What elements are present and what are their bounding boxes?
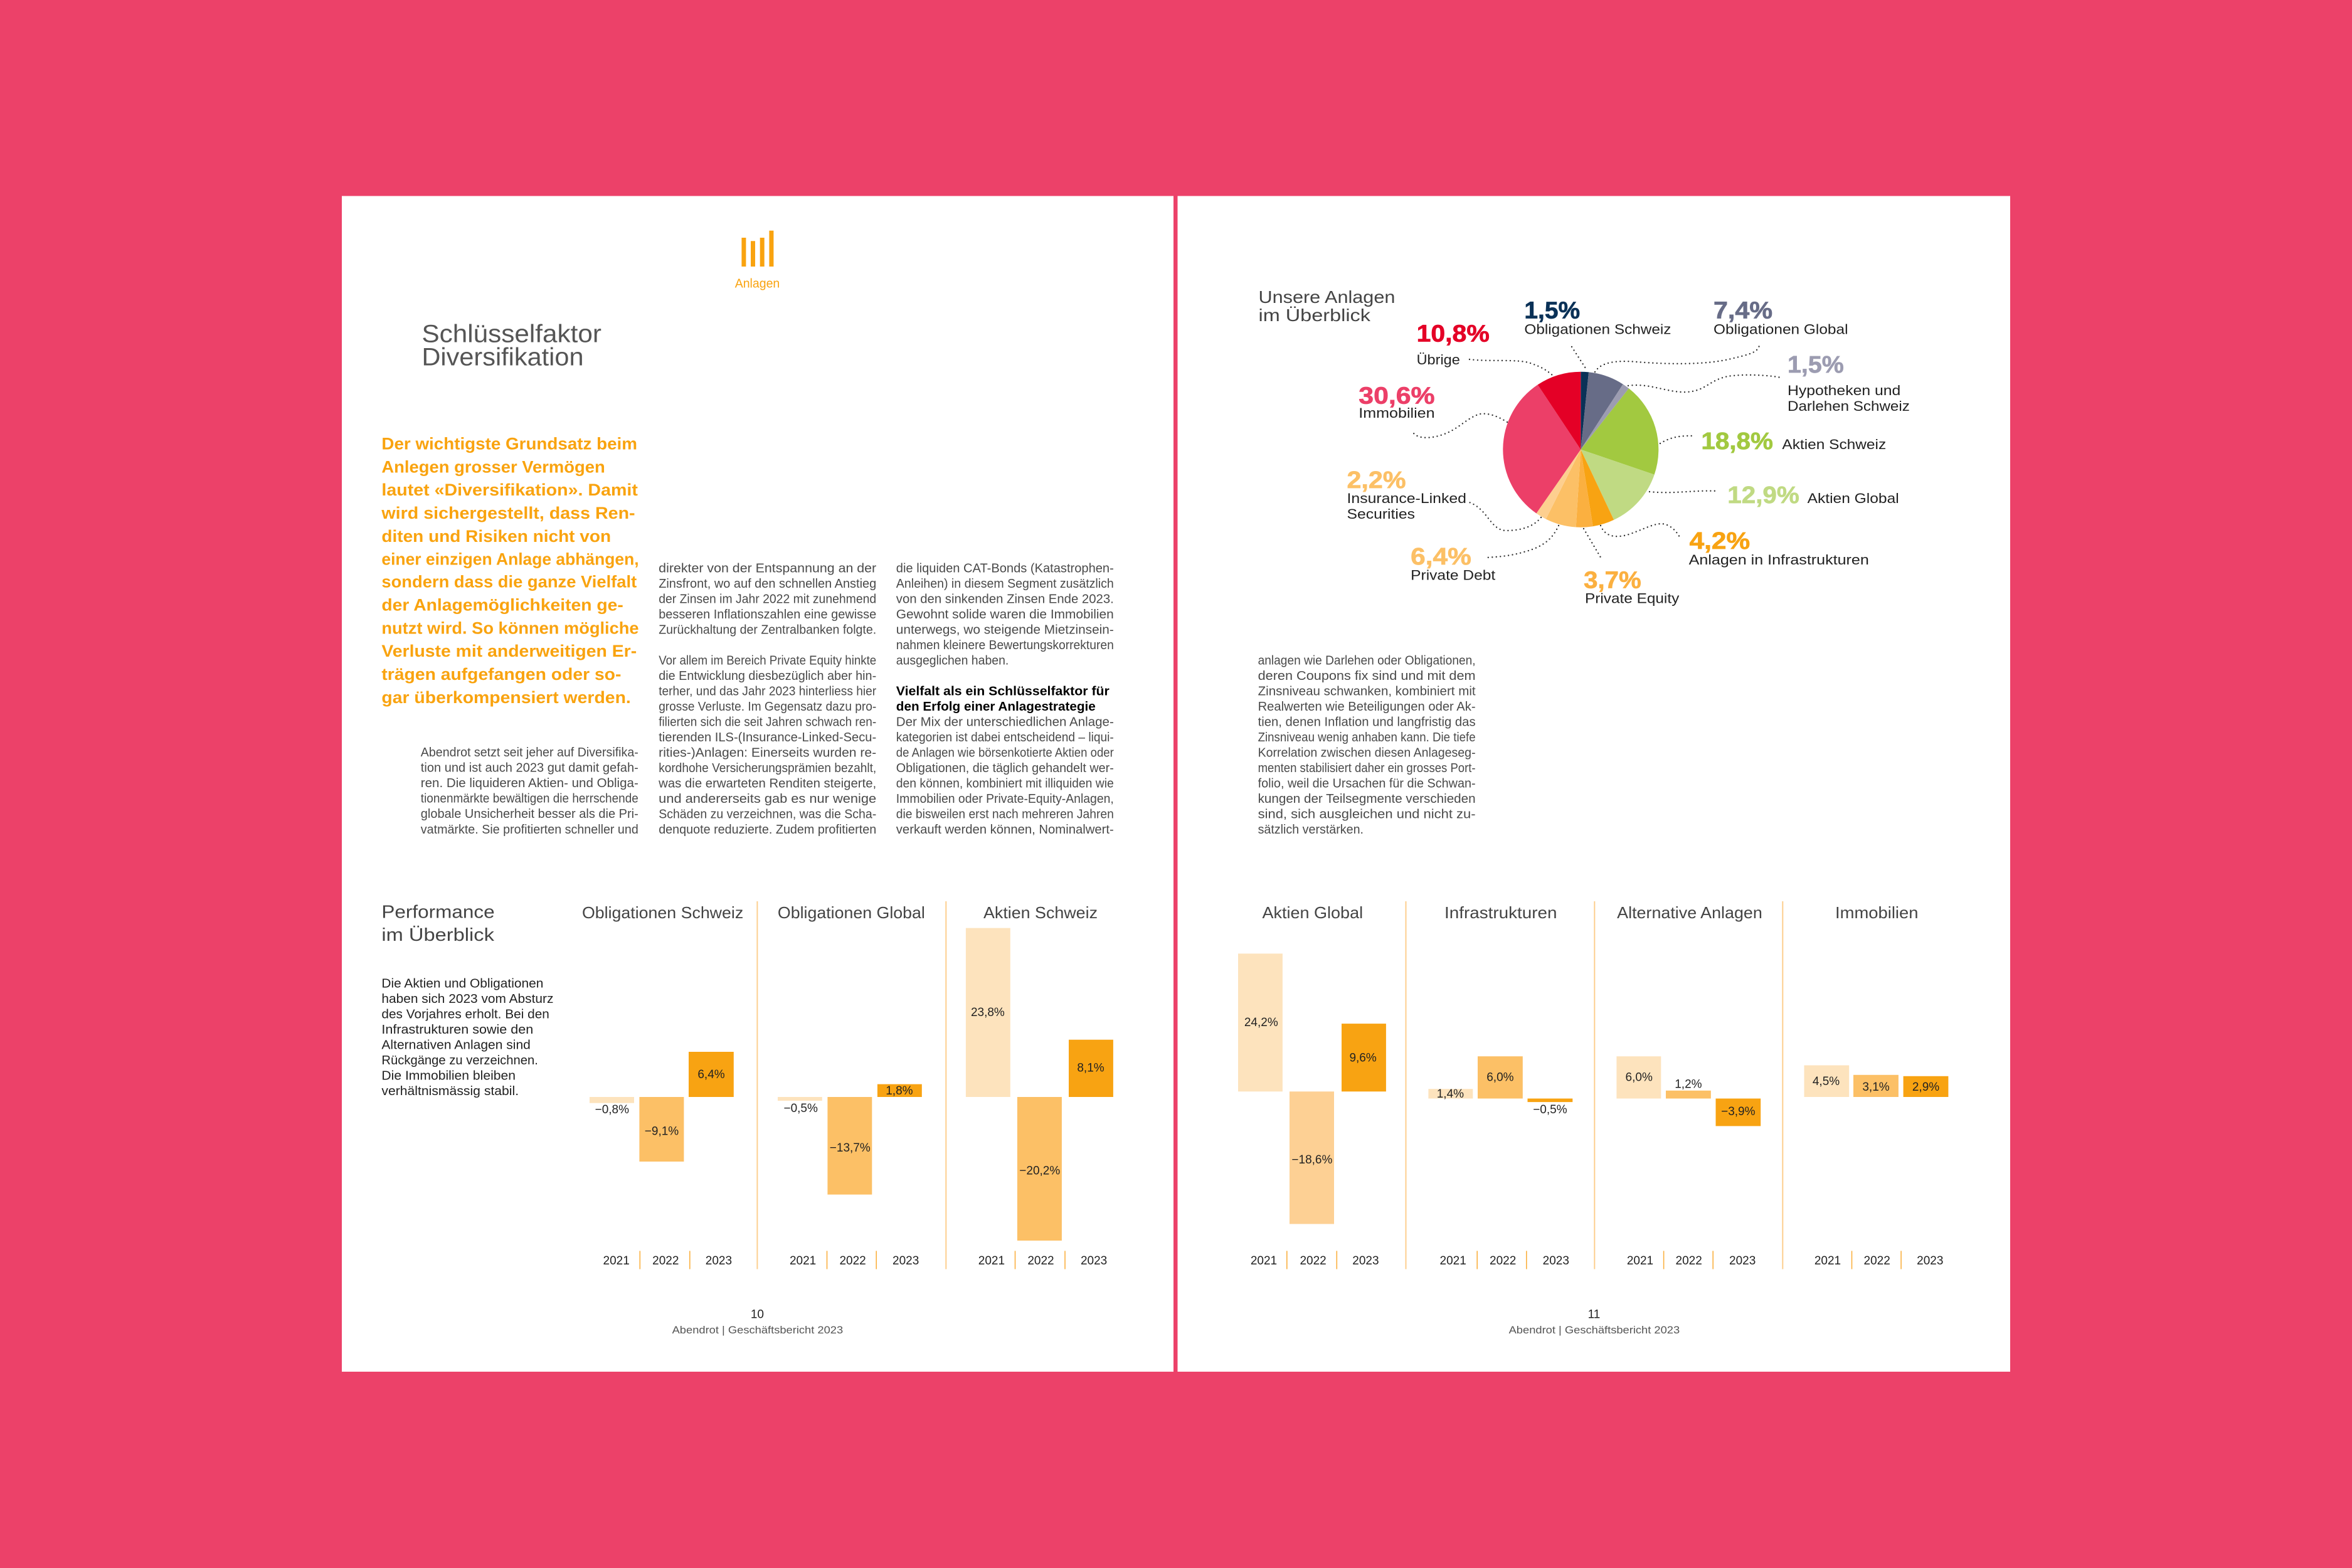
bar chart: Aktien Schweiz: [966, 903, 1113, 1269]
bar chart: Alternative Anlagen: [1616, 903, 1762, 1269]
body text column 3: den Erfolg einer Anlagestrategie: [896, 700, 1096, 714]
body text column 2: grosse Verluste. Im Gegensatz dazu pro-: [659, 700, 876, 714]
bar chart: Infrastrukturen: 2022: [1490, 1254, 1516, 1268]
body text column 1: [421, 746, 638, 837]
body text column 2: die Entwicklung diesbezüglich aber hin-: [659, 669, 876, 683]
body text right page: sind, sich ausgleichen und nicht zu-: [1258, 808, 1476, 822]
callout: Private Equity: Private Equity: [1585, 591, 1679, 606]
heading: Unsere Anlagen im Überblick: Unsere Anlagen: [1258, 287, 1395, 307]
callout: Insurance-Linked Securities: [1347, 467, 1466, 522]
callout: Aktien Global: [1727, 482, 1899, 509]
performance intro text: haben sich 2023 vom Absturz: [381, 992, 553, 1006]
body text column 2: tierenden ILS-(Insurance-Linked-Secu-: [659, 731, 876, 744]
body text column 2: und andererseits gab es nur wenige: [659, 792, 876, 806]
body text column 3: die bisweilen erst nach mehreren Jahren: [896, 808, 1114, 822]
body text column 3: unterwegs, wo steigende Mietzinsein-: [896, 623, 1114, 637]
body text column 2: der Zinsen im Jahr 2022 mit zunehmend: [659, 593, 876, 607]
body text column 3: Anleihen) in diesem Segment zusätzlich: [896, 577, 1114, 591]
title: Schlüsselfaktor: [421, 320, 601, 348]
body text column 2: was die erwarteten Renditen steigerte,: [658, 777, 876, 791]
footer: page 10: Abendrot | Geschäftsbericht 2023: [672, 1324, 843, 1336]
lead paragraph: trägen aufgefangen oder so-: [381, 665, 621, 684]
body text column 3: verkauft werden können, Nominalwert-: [896, 823, 1114, 837]
body text right page: anlagen wie Darlehen oder Obligationen,: [1258, 654, 1476, 668]
body text column 3: nahmen kleinere Bewertungskorrekturen: [896, 638, 1114, 652]
lead paragraph: sondern dass die ganze Vielfalt: [381, 573, 637, 591]
body text column 2: besseren Inflationszahlen eine gewisse: [659, 608, 876, 622]
performance intro text: Rückgänge zu verzeichnen.: [381, 1054, 538, 1067]
lead paragraph: einer einzigen Anlage abhängen,: [381, 550, 639, 569]
body text column 3: Der Mix der unterschiedlichen Anlage-: [896, 716, 1114, 729]
body text right page: folio, weil die Ursachen für die Schwan-: [1258, 777, 1476, 791]
lead paragraph: wird sichergestellt, dass Ren-: [381, 504, 635, 522]
body text right page: Zinsniveau schwanken, kombiniert mit: [1258, 685, 1476, 699]
icon: bar chart section icon: [741, 231, 773, 267]
performance intro text: Infrastrukturen sowie den: [381, 1023, 533, 1037]
bar chart: Obligationen Global: −0,5%: [783, 1102, 818, 1115]
callout: Übrige: [1417, 320, 1490, 368]
body text column 1: tion und ist auch 2023 gut damit gefah-: [421, 761, 638, 775]
callout: Obligationen Global: [1714, 297, 1848, 337]
bar chart: Aktien Global: 2021: [1251, 1254, 1277, 1268]
callout: Aktien Global: Aktien Global: [1808, 490, 1899, 506]
footer: page 11: Abendrot | Geschäftsbericht 2023: [1509, 1324, 1680, 1336]
body text column 3: von den sinkenden Zinsen Ende 2023.: [896, 593, 1114, 607]
bar chart: Immobilien: 2021: [1814, 1254, 1841, 1268]
body text column 2: Vor allem im Bereich Private Equity hinkte: [659, 654, 876, 668]
lead paragraph: nutzt wird. So können mögliche: [381, 618, 639, 637]
bar chart: Immobilien: Immobilien: [1835, 903, 1918, 922]
bar chart: Aktien Global: 2023: [1352, 1254, 1379, 1268]
bar chart: Alternative Anlagen: 6,0%: [1626, 1071, 1653, 1084]
bar chart: Aktien Global: 9,6%: [1349, 1051, 1377, 1064]
bar chart: Infrastrukturen: 2021: [1440, 1254, 1466, 1268]
bar chart: Alternative Anlagen: 2021: [1627, 1254, 1653, 1268]
body text right page: menten stabilisiert daher ein grosses Port-: [1258, 761, 1476, 775]
lead paragraph: Verluste mit anderweitigen Er-: [381, 642, 637, 660]
bar chart: Infrastrukturen: 2023: [1543, 1254, 1569, 1268]
callout: Anlagen in Infrastrukturen: Anlagen in Infrastrukturen: [1689, 552, 1869, 568]
bar chart: Aktien Global: [1238, 903, 1386, 1269]
bar chart: Aktien Schweiz: Aktien Schweiz: [983, 903, 1098, 922]
body text column 3: de Anlagen wie börsenkotierte Aktien oder: [896, 746, 1114, 760]
bar chart: Obligationen Global: [778, 903, 925, 1269]
lead paragraph: [381, 434, 639, 707]
callout: Private Equity: [1584, 567, 1679, 606]
bar chart: Obligationen Schweiz: 2023: [706, 1254, 732, 1268]
panel: left page: [342, 196, 1173, 1372]
callout: Private Debt: [1411, 544, 1495, 583]
body text column 1: globale Unsicherheit besser als die Pri-: [421, 807, 638, 821]
performance intro text: des Vorjahres erholt. Bei den: [381, 1007, 549, 1021]
bar chart: Aktien Schweiz: 2023: [1081, 1254, 1107, 1268]
bar chart: Alternative Anlagen: Alternative Anlagen: [1617, 903, 1762, 922]
body text column 1: ren. Die liquideren Aktien- und Obliga-: [421, 776, 638, 790]
callout: Private Debt: 6,4%: [1411, 544, 1471, 570]
callout: Immobilien: [1359, 383, 1435, 421]
heading: Unsere Anlagen im Überblick: im Überblick: [1258, 305, 1371, 325]
callout leaders: dotted lines: [1412, 346, 1781, 559]
footer: page 10: 10: [751, 1308, 764, 1321]
body text column 2: Schäden zu verzeichnen, was die Scha-: [659, 808, 876, 822]
lead paragraph: lautet «Diversifikation». Damit: [381, 480, 638, 499]
bar chart: Obligationen Schweiz: 2021: [603, 1254, 630, 1268]
bar chart: Alternative Anlagen: 2022: [1676, 1254, 1702, 1268]
bar chart: Aktien Schweiz: 8,1%: [1077, 1062, 1104, 1075]
callout: Obligationen Global: 7,4%: [1714, 297, 1772, 324]
callout: Anlagen in Infrastrukturen: [1689, 528, 1869, 568]
bar chart: Obligationen Schweiz: 6,4%: [697, 1068, 725, 1081]
performance intro text: verhältnismässig stabil.: [381, 1084, 519, 1098]
heading: Performance im Überblick: Performance: [381, 902, 495, 922]
body text column 1: Abendrot setzt seit jeher auf Diversifika-: [421, 746, 638, 760]
callout: Obligationen Schweiz: 1,5%: [1524, 297, 1580, 324]
body text right page: kungen der Teilsegmente verschieden: [1258, 792, 1476, 806]
callout: Obligationen Schweiz: Obligationen Schweiz: [1524, 321, 1671, 337]
bar chart: Obligationen Global: 1,8%: [886, 1084, 913, 1098]
callout: Aktien Global: 12,9%: [1727, 482, 1799, 509]
callout: Übrige: Übrige: [1417, 352, 1460, 368]
footer: page 11: [1509, 1308, 1680, 1336]
bar chart: Obligationen Schweiz: −0,8%: [595, 1103, 629, 1116]
bar chart: Obligationen Global: 2021: [790, 1254, 816, 1268]
bar chart: Immobilien: 2022: [1864, 1254, 1890, 1268]
body text column 2: filierten sich die seit Jahren schwach ren-: [659, 716, 876, 729]
bar chart: Infrastrukturen: 6,0%: [1486, 1071, 1514, 1084]
callout: Anlagen in Infrastrukturen: 4,2%: [1690, 528, 1750, 554]
lead paragraph: diten und Risiken nicht von: [381, 527, 611, 546]
pie chart: [1503, 372, 1658, 527]
bar chart: Immobilien: 2,9%: [1912, 1081, 1939, 1094]
bar chart: Aktien Schweiz: −20,2%: [1019, 1164, 1060, 1177]
section label: Anlagen: [735, 277, 780, 290]
callout: Hypotheken und Darlehen Schweiz: Darlehen Schweiz: [1788, 398, 1910, 414]
lead paragraph: gar überkompensiert werden.: [381, 688, 631, 707]
bar chart: Obligationen Schweiz: Obligationen Schweiz: [582, 903, 743, 922]
body text column 1: vatmärkte. Sie profitierten schneller und: [421, 823, 638, 837]
bar chart: Aktien Global: 2022: [1300, 1254, 1327, 1268]
bar chart: Obligationen Global: 2022: [839, 1254, 866, 1268]
footer: page 10: [672, 1308, 843, 1336]
body text right page: Korrelation zwischen diesen Anlageseg-: [1258, 746, 1476, 760]
body text column 3: [896, 562, 1114, 837]
body text right page: sätzlich verstärken.: [1258, 823, 1364, 837]
body text column 3: Vielfalt als ein Schlüsselfaktor für: [896, 685, 1110, 699]
lead paragraph: der Anlagemöglichkeiten ge-: [381, 596, 623, 615]
bar chart: Alternative Anlagen: 1,2%: [1675, 1078, 1702, 1091]
body text column 2: rities-)Anlagen: Einerseits wurden re-: [659, 746, 876, 760]
lead paragraph: Der wichtigste Grundsatz beim: [381, 434, 637, 453]
bar chart: Immobilien: 4,5%: [1813, 1075, 1840, 1088]
heading: Performance im Überblick: [381, 902, 495, 945]
bar chart: Immobilien: 2023: [1917, 1254, 1943, 1268]
body text column 2: [658, 562, 877, 837]
bar chart: Immobilien: [1804, 903, 1948, 1269]
bar chart: Obligationen Schweiz: 2022: [652, 1254, 679, 1268]
heading: Performance im Überblick: im Überblick: [381, 925, 494, 945]
bar chart: Aktien Global: 24,2%: [1244, 1016, 1278, 1029]
callout: Aktien Schweiz: [1701, 428, 1886, 455]
body text right page: [1258, 654, 1476, 837]
performance intro text: [381, 977, 553, 1098]
bar chart: Obligationen Global: Obligationen Global: [778, 903, 925, 922]
title: Diversifikation: [421, 344, 583, 371]
callout: Hypotheken und Darlehen Schweiz: Hypotheken und: [1788, 383, 1900, 398]
callout: Hypotheken und Darlehen Schweiz: 1,5%: [1788, 352, 1844, 378]
body text column 2: denquote reduzierte. Zudem profitierten: [659, 823, 876, 837]
body text column 3: Gewohnt solide waren die Immobilien: [896, 608, 1114, 622]
bar chart: Infrastrukturen: [1428, 903, 1572, 1269]
callout: Aktien Schweiz: Aktien Schweiz: [1782, 437, 1886, 452]
body text column 3: den können, kombiniert mit illiquiden wie: [896, 777, 1114, 791]
callout: Private Equity: 3,7%: [1584, 567, 1641, 593]
performance intro text: Alternativen Anlagen sind: [381, 1038, 531, 1052]
callout: Obligationen Global: Obligationen Global: [1714, 321, 1848, 337]
bar chart: Aktien Global: −18,6%: [1291, 1153, 1332, 1167]
bar chart: Infrastrukturen: Infrastrukturen: [1444, 903, 1557, 922]
body text column 2: Zinsfront, wo auf den schnellen Anstieg: [659, 577, 876, 591]
bar chart: Aktien Schweiz: 23,8%: [971, 1006, 1005, 1019]
body text right page: tien, denen Inflation und langfristig das: [1258, 716, 1476, 729]
bar chart: Obligationen Schweiz: −9,1%: [645, 1125, 679, 1138]
callout: Insurance-Linked Securities: 2,2%: [1347, 467, 1406, 494]
callout: Insurance-Linked Securities: Securities: [1347, 506, 1415, 522]
title: [421, 320, 601, 371]
footer: page 11: 11: [1588, 1308, 1600, 1321]
body text column 2: terher, und das Jahr 2023 hinterliess hier: [659, 685, 877, 699]
callout: Aktien Schweiz: 18,8%: [1701, 428, 1773, 455]
body text column 1: tionenmärkte bewältigen die herrschende: [421, 792, 638, 805]
lead paragraph: Anlegen grosser Vermögen: [381, 457, 605, 476]
body text column 2: Zurückhaltung der Zentralbanken folgte.: [659, 623, 876, 637]
bar chart: Obligationen Global: −13,7%: [830, 1142, 871, 1155]
bar chart: Aktien Schweiz: 2021: [978, 1254, 1005, 1268]
body text column 3: ausgeglichen haben.: [896, 654, 1009, 668]
panel: right page: [1178, 196, 2010, 1372]
bar chart: Alternative Anlagen: −3,9%: [1721, 1105, 1756, 1118]
body text column 3: die liquiden CAT-Bonds (Katastrophen-: [896, 562, 1114, 576]
callout: Übrige: 10,8%: [1417, 320, 1490, 347]
bar chart: Obligationen Schweiz: [582, 903, 743, 1269]
performance intro text: Die Immobilien bleiben: [381, 1069, 516, 1083]
callout: Immobilien: 30,6%: [1359, 383, 1435, 409]
bar chart: Aktien Global: Aktien Global: [1262, 903, 1363, 922]
callout: Hypotheken und Darlehen Schweiz: [1788, 352, 1910, 414]
callout: Insurance-Linked Securities: Insurance-Linked: [1347, 490, 1466, 506]
bar chart: Immobilien: 3,1%: [1862, 1081, 1890, 1094]
body text column 2: direkter von der Entspannung an der: [659, 562, 877, 576]
body text column 3: kategorien ist dabei entscheidend – liqui-: [896, 731, 1114, 744]
body text right page: Realwerten wie Beteiligungen oder Ak-: [1258, 700, 1476, 714]
body text column 3: Immobilien oder Private-Equity-Anlagen,: [896, 792, 1114, 806]
bar chart: Aktien Schweiz: 2022: [1027, 1254, 1054, 1268]
bar chart: Obligationen Global: 2023: [893, 1254, 919, 1268]
body text right page: deren Coupons fix sind und mit dem: [1258, 669, 1476, 683]
bar chart: Infrastrukturen: −0,5%: [1533, 1103, 1567, 1116]
body text column 2: kordhohe Versicherungsprämien bezahlt,: [659, 761, 876, 775]
callout: Immobilien: Immobilien: [1359, 405, 1435, 421]
callout: Private Debt: Private Debt: [1411, 568, 1495, 583]
heading: Unsere Anlagen im Überblick: [1258, 287, 1395, 325]
body text column 3: Obligationen, die täglich gehandelt wer-: [896, 761, 1114, 775]
bar chart: Infrastrukturen: 1,4%: [1437, 1088, 1464, 1101]
body text right page: Zinsniveau wenig anhaben kann. Die tiefe: [1258, 731, 1476, 744]
bar chart: Alternative Anlagen: 2023: [1729, 1254, 1756, 1268]
performance intro text: Die Aktien und Obligationen: [381, 977, 543, 991]
callout: Obligationen Schweiz: [1524, 297, 1671, 337]
